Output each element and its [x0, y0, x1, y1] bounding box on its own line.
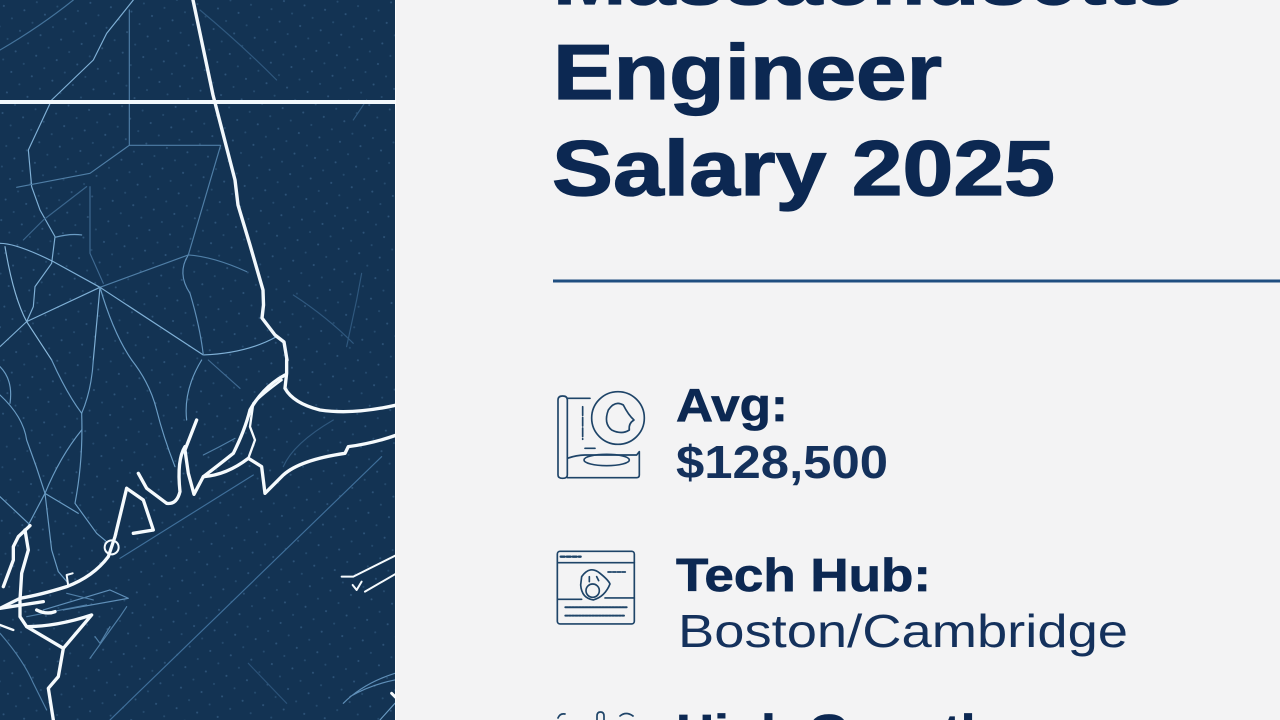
label: Avg: Avg:	[676, 379, 788, 431]
stat: average salary	[558, 379, 888, 488]
stat: tech hub	[557, 549, 1128, 657]
map: faint county lines, northern section	[0, 0, 367, 360]
stat: high growth, cropped by the bottom edge	[558, 705, 993, 720]
map: faint county lines and offshore marks, southern section	[0, 360, 395, 720]
title	[552, 0, 1185, 212]
icon: browser window with detail	[557, 551, 634, 624]
panel edge	[395, 0, 396, 720]
map: coastline and Cape Cod	[0, 360, 397, 720]
panel: blueprint map of Massachusetts	[0, 0, 397, 720]
icon: blueprint with circular detail	[558, 392, 644, 478]
map: state boundary lines	[0, 0, 395, 360]
value: Boston/Cambridge: Boston/Cambridge	[678, 605, 1128, 657]
title: Engineer	[553, 28, 942, 116]
icon: people, cropped	[558, 712, 633, 720]
title divider rule	[553, 280, 1280, 282]
value: $128,500: $128,500	[676, 436, 888, 488]
label: Tech Hub: Tech Hub:	[676, 549, 931, 601]
title: Salary 2025	[552, 124, 1055, 212]
